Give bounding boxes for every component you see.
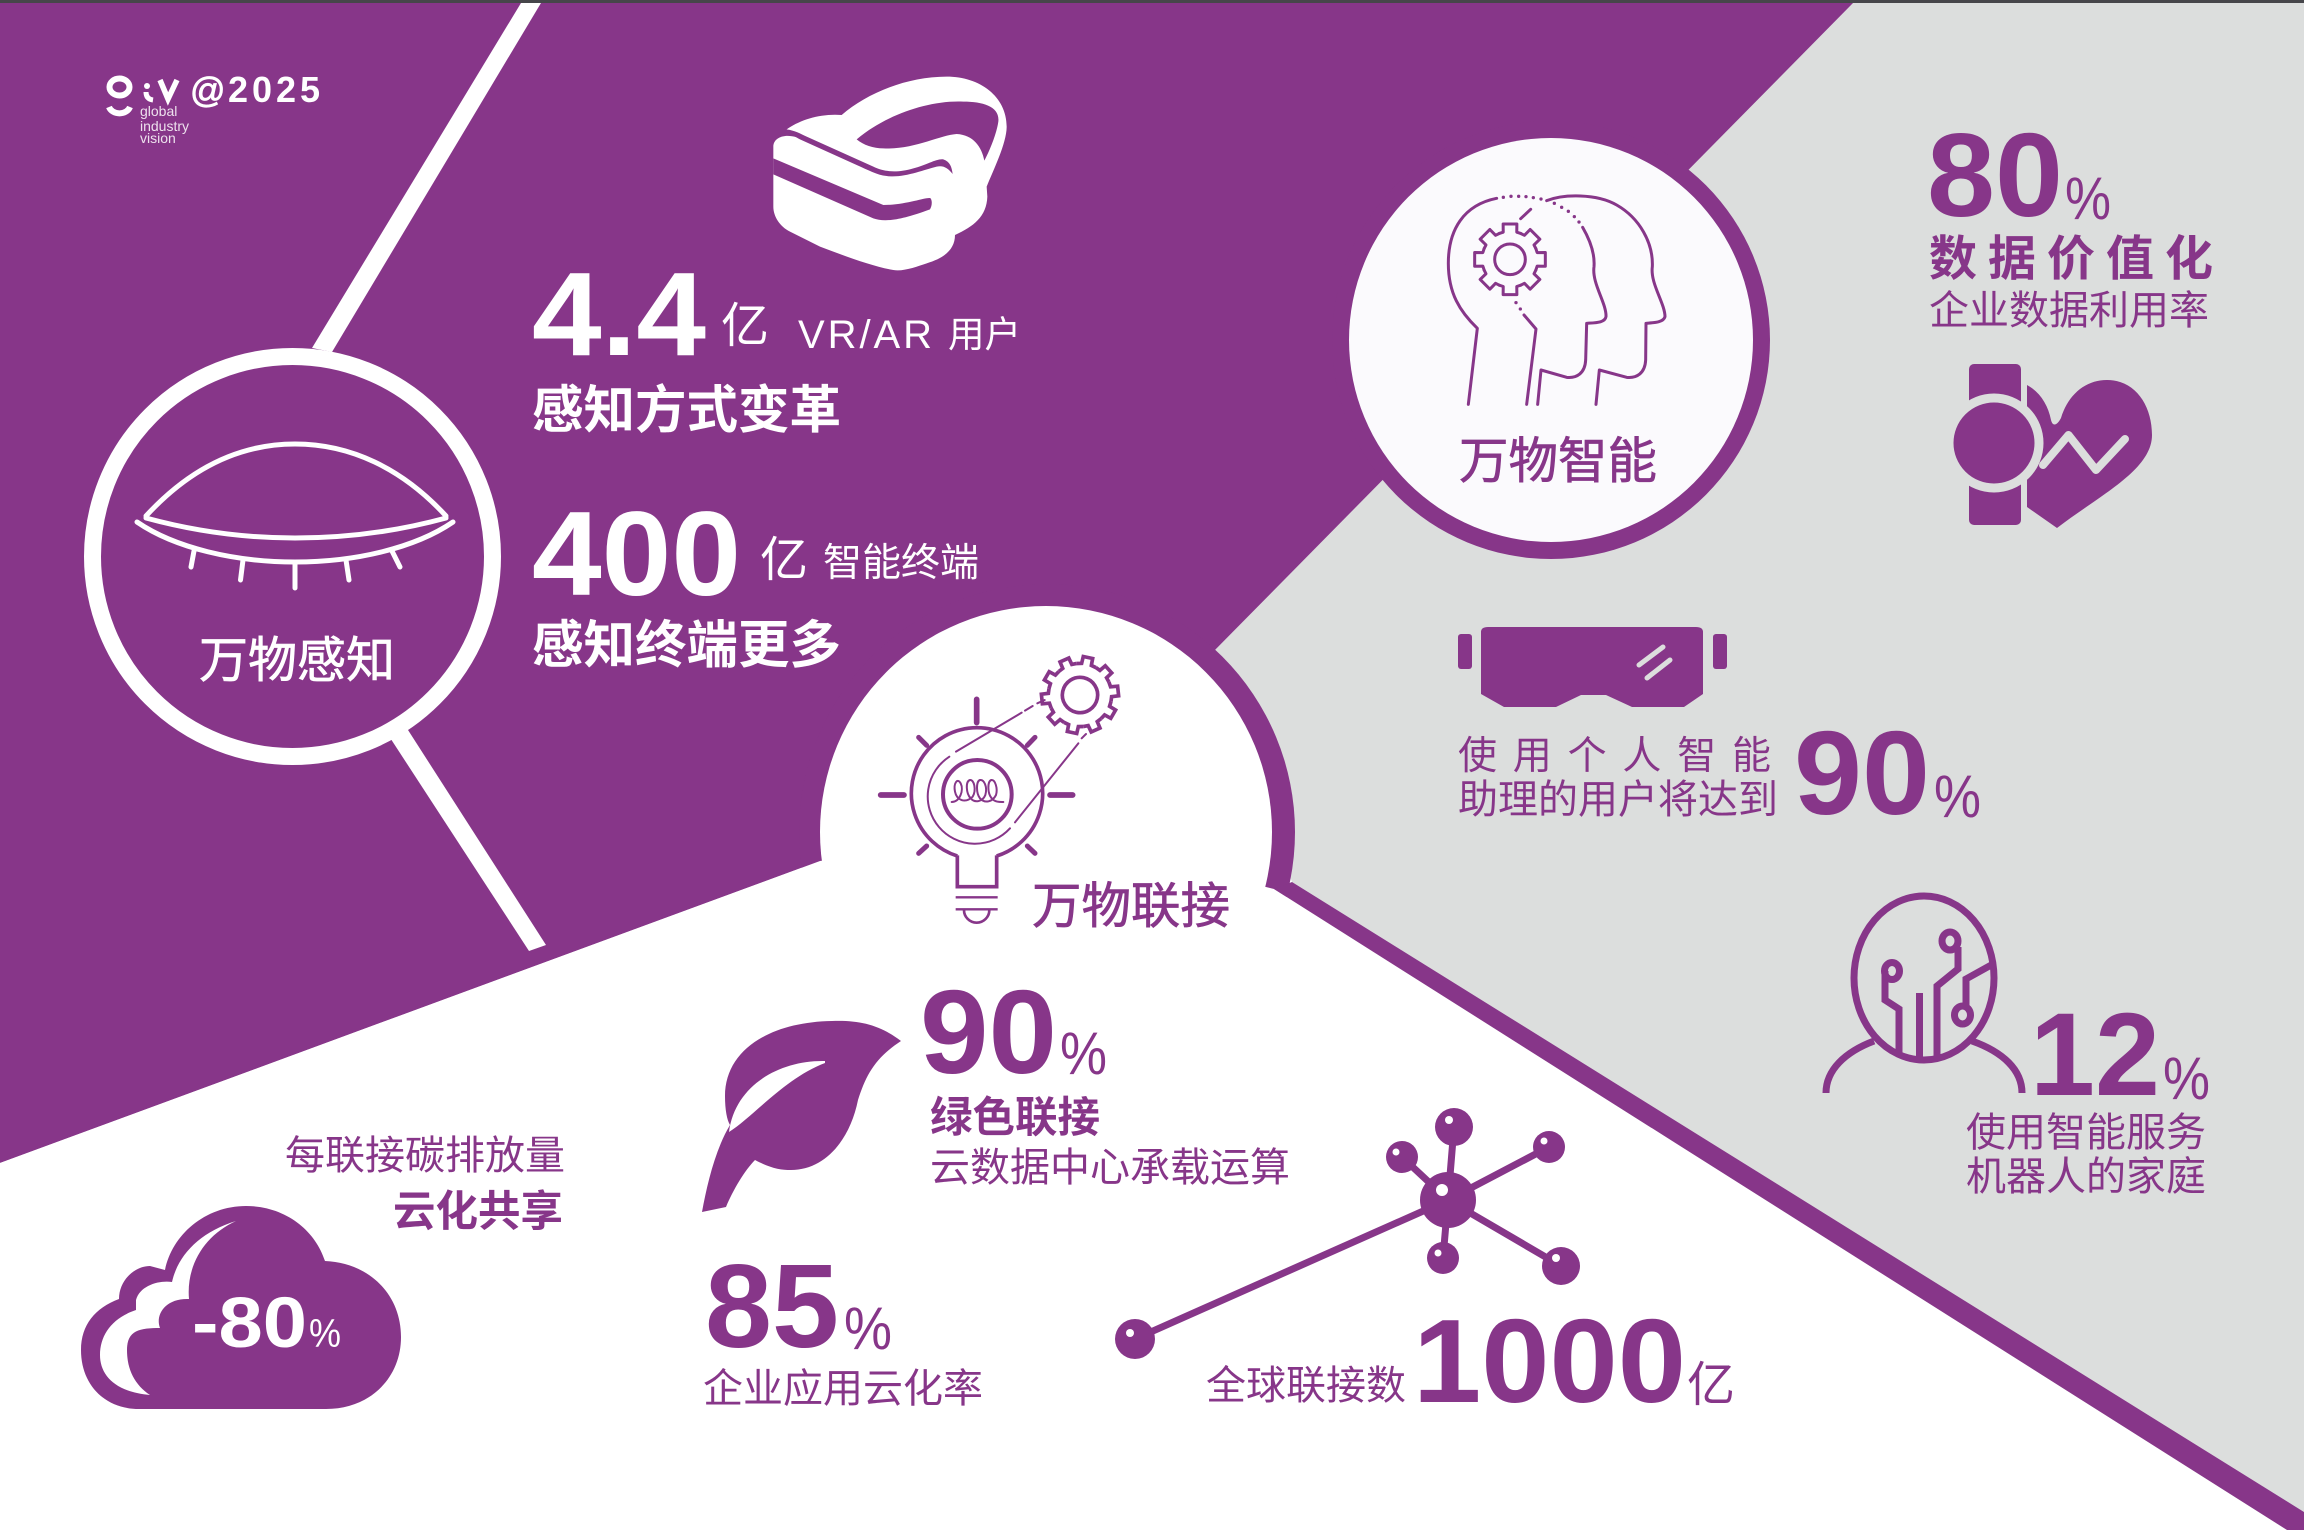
stat: 400亿 智能终端: 亿 [760, 520, 808, 590]
icon: cloud with -80%: -80 [192, 1284, 307, 1363]
stat: 使用个人智能助理的用户将达到 90%: 使用个人智能 [1458, 725, 1771, 781]
stat: 使用个人智能助理的用户将达到 90% [1458, 707, 1981, 840]
text: 每联接碳排放量 云化共享 [285, 1123, 565, 1239]
stat: 90% 绿色联接 [920, 966, 1290, 1193]
magnifier handle lower [385, 730, 546, 951]
stat: 85% 企业应用云化率: % [844, 1295, 892, 1362]
icon: leaf [702, 1021, 901, 1212]
panel: purple background [0, 0, 1856, 1163]
stat: 90% 绿色联接: 90 [920, 966, 1057, 1099]
stat: 4.4亿 VR/AR 用户: VR/AR [798, 313, 932, 357]
stat: 12% 使用智能服务机器人的家庭: % [2163, 1045, 2210, 1112]
icon: AR goggles [1458, 627, 1727, 707]
stat: 使用个人智能助理的用户将达到 90%: % [1934, 763, 1981, 830]
text: 每联接碳排放量 云化共享: 每联接碳排放量 [285, 1123, 565, 1181]
stat: 90% 绿色联接: % [1060, 1020, 1107, 1087]
stat: 80% 数据价值化: % [2065, 165, 2111, 232]
logo: giv @2025: global [140, 103, 177, 119]
stat: 使用个人智能助理的用户将达到 90%: 助理的用户将达到 [1458, 767, 1778, 825]
panel: white connection semicircle and lower area [0, 606, 2287, 1530]
heading: 万物感知: 万物感知 [199, 621, 395, 692]
stat: 80% 数据价值化: 80 [1927, 109, 2063, 242]
text: 数据价值化: 数据价值化 [1929, 219, 2213, 289]
icon: closed eye [137, 444, 453, 588]
stat: 12% 使用智能服务机器人的家庭: 机器人的家庭 [1966, 1144, 2206, 1202]
stat: 使用个人智能助理的用户将达到 90%: 90 [1794, 707, 1930, 840]
top edge strip [0, 0, 2304, 3]
stat: 90% 绿色联接: 绿色联接 [930, 1084, 1100, 1145]
stat: 90% 绿色联接: 云数据中心承载运算 [930, 1135, 1290, 1193]
stat: 12% 使用智能服务机器人的家庭 [1966, 989, 2210, 1202]
stat: 400亿 智能终端: 智能终端 [823, 532, 979, 588]
logo: giv @2025: @ [190, 71, 226, 110]
stat: 4.4亿 VR/AR 用户 [532, 248, 1021, 443]
icon: VR headset white [773, 77, 1007, 270]
stat: 4.4亿 VR/AR 用户: 亿 [721, 286, 769, 356]
magnifier handle upper [312, 3, 541, 352]
stat: 全球联接数 1000亿: 亿 [1687, 1345, 1735, 1415]
logo: giv @2025: vision [140, 130, 176, 146]
icon: cloud with -80%: % [309, 1312, 341, 1356]
stat: 4.4亿 VR/AR 用户: 4.4 [532, 248, 706, 381]
stat: 400亿 智能终端: 400 [532, 487, 741, 621]
heading: 万物智能: 万物智能 [1459, 422, 1657, 493]
icon: network molecule [1115, 1108, 1580, 1359]
panel: intelligence circle [1332, 121, 1770, 559]
logo: giv @2025 [109, 69, 320, 146]
logo: giv @2025: industry [140, 118, 189, 134]
stat: 4.4亿 VR/AR 用户: 用户 [948, 305, 1021, 358]
stat: 全球联接数 1000亿: 1000 [1413, 1295, 1686, 1428]
stat: 12% 使用智能服务机器人的家庭: 12 [2030, 989, 2160, 1121]
diagonal purple band [1274, 882, 2304, 1530]
stat: 80% 数据价值化 [1927, 109, 2213, 336]
text: 每联接碳排放量 云化共享: 云化共享 [393, 1178, 563, 1239]
icon: cloud with -80% [81, 1206, 401, 1409]
icon: smart watch with heart [1949, 364, 2152, 528]
heading: 万物联接: 万物联接 [1032, 867, 1230, 938]
text: 企业数据利用率: 企业数据利用率 [1929, 278, 2209, 336]
stat: 85% 企业应用云化率: 85 [705, 1240, 839, 1373]
text: 感知终端更多: 感知终端更多 [532, 603, 841, 678]
stat: 400亿 智能终端 [532, 487, 979, 678]
stat: 85% 企业应用云化率: 企业应用云化率 [703, 1356, 983, 1414]
icon: light bulb with gear [881, 649, 1127, 923]
stat: 85% 企业应用云化率 [703, 1240, 983, 1414]
stat: 全球联接数 1000亿 [1206, 1295, 1735, 1428]
panel: grey background wedge [1213, 0, 2304, 1512]
text: 感知方式变革: 感知方式变革 [532, 368, 841, 443]
stat: 全球联接数 1000亿: 全球联接数 [1206, 1353, 1406, 1411]
icon: two heads with gear [1448, 195, 1665, 404]
icon: robot head with circuits [1826, 896, 2022, 1093]
logo: giv @2025: 2025 [228, 69, 320, 110]
panel: perception circle [92, 356, 492, 756]
stat: 12% 使用智能服务机器人的家庭: 使用智能服务 [1966, 1100, 2206, 1158]
